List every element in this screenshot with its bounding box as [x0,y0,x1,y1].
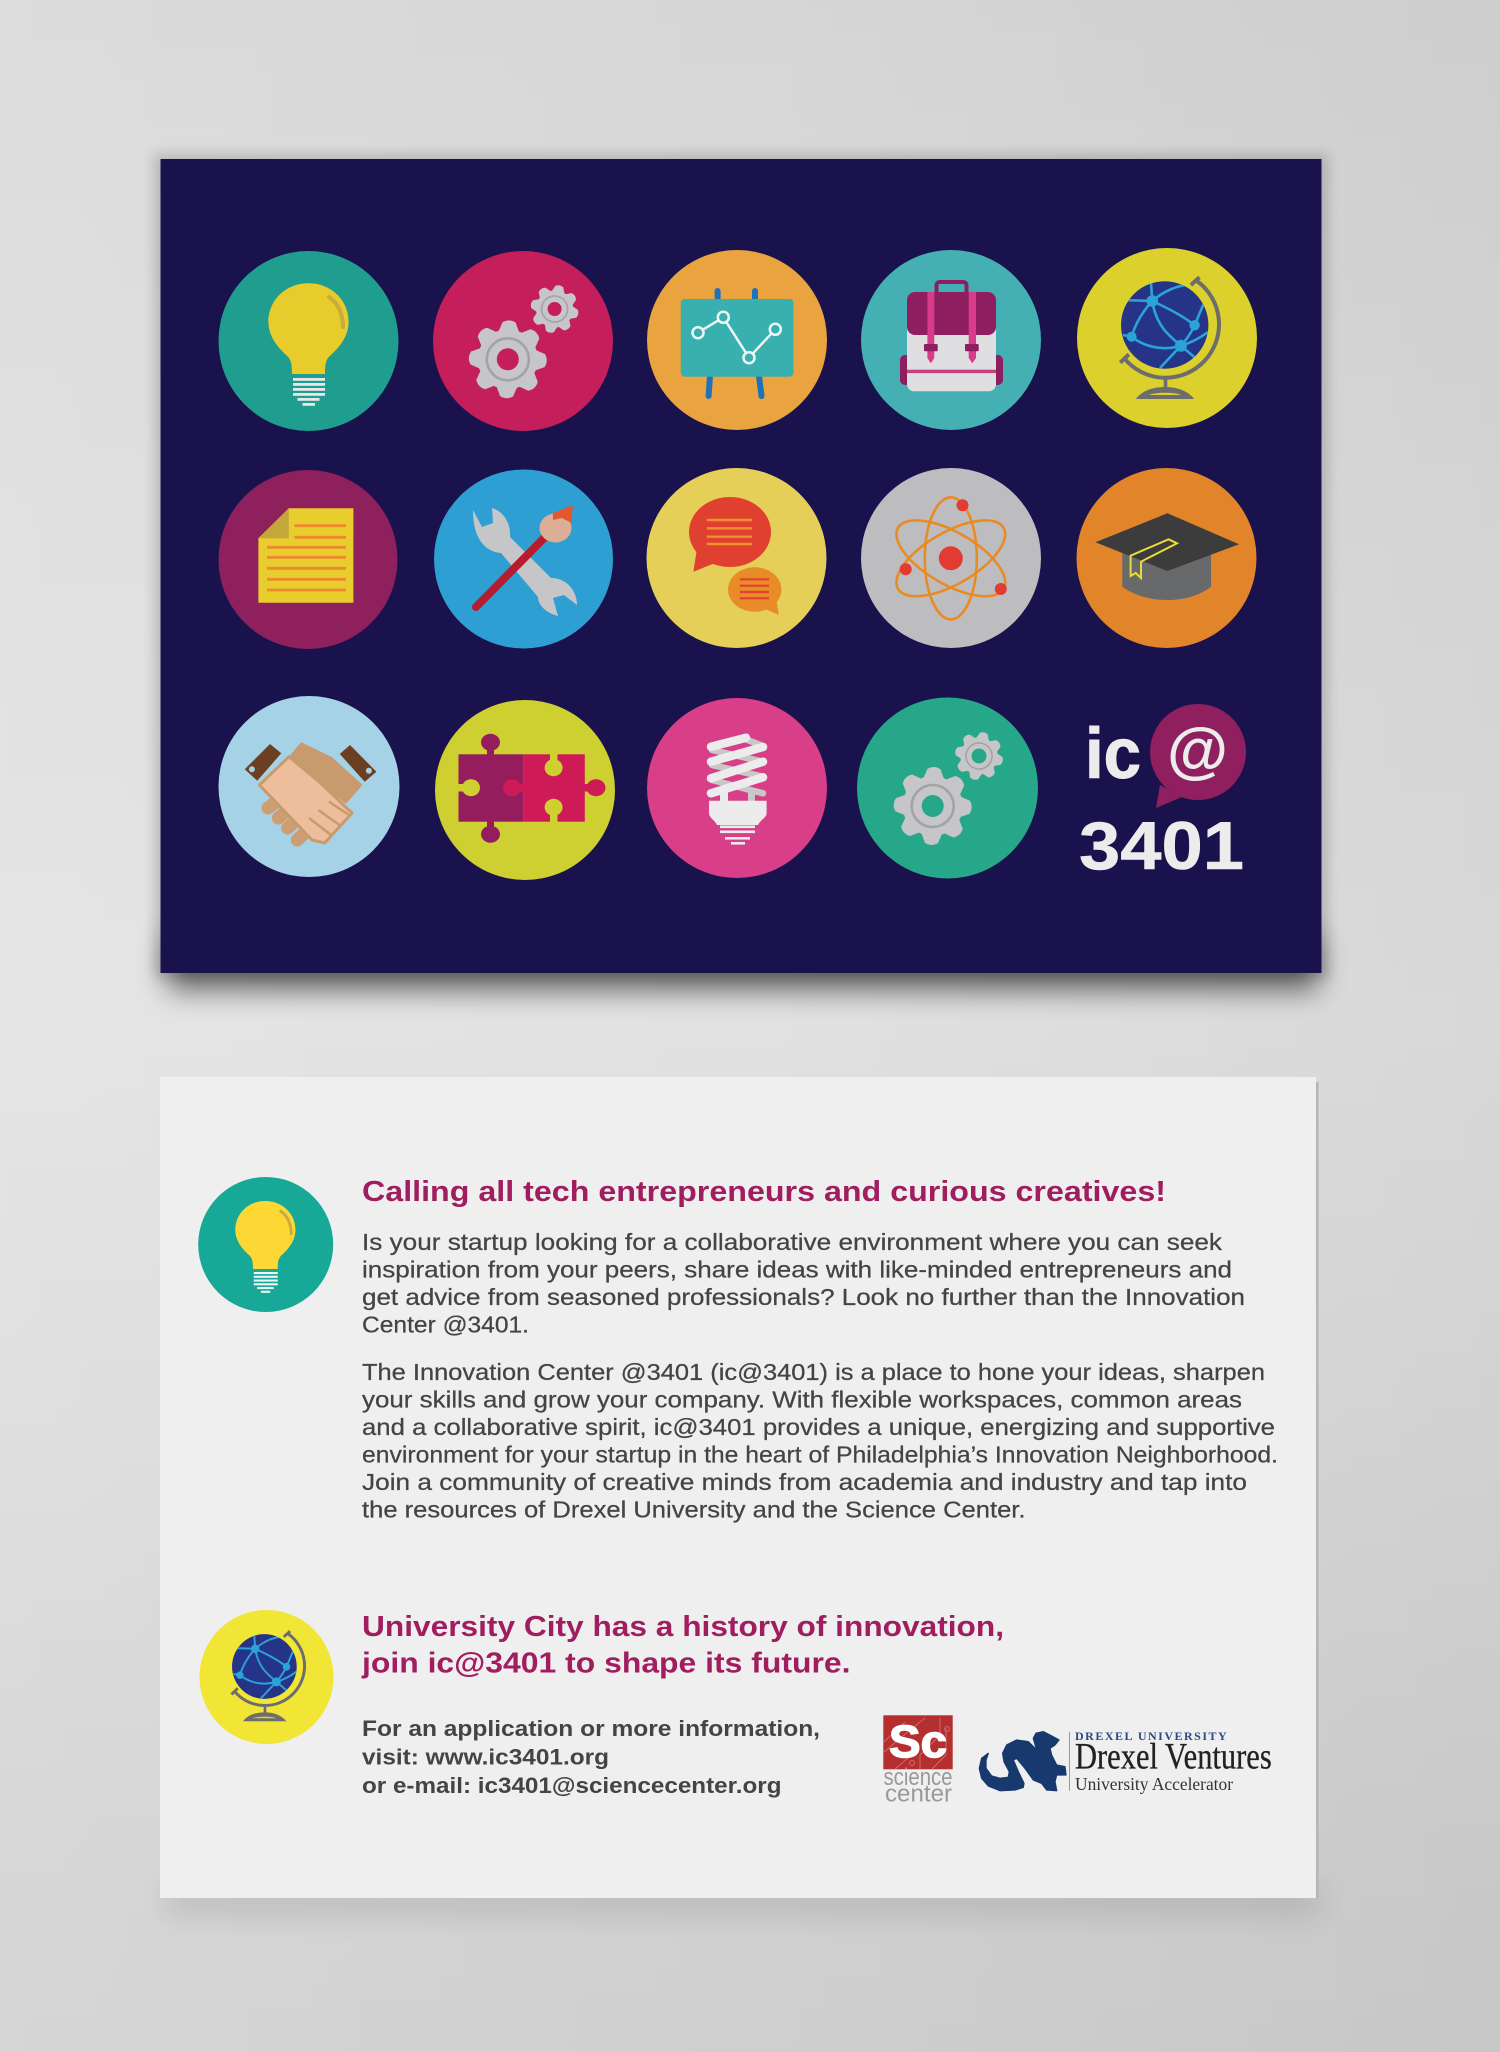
text block: description paragraph: and a collaborative spirit, ic@3401 provides a unique, energizing and supportive [362,1414,1275,1440]
logo: drexel dragon [979,1732,1066,1791]
panel: front card [160,159,1322,973]
text block: description paragraph: Join a community of creative minds from academia and industry and tap into [362,1469,1247,1495]
icon: graduation cap [1076,468,1256,648]
logo: drexel ventures wordmark: DREXEL UNIVERSITY [1075,1729,1227,1743]
panel: back card [160,1077,1318,1898]
heading: university city [361,1611,1004,1680]
logo: science center: science [884,1764,952,1791]
logo: ic@3401: @ [1167,716,1228,785]
icon: backpack [861,250,1041,430]
icon: speech bubbles [646,468,826,648]
heading: calling all: Calling all tech entrepreneurs and curious creatives! [362,1176,1166,1208]
icon: document [218,470,398,649]
text block: intro paragraph: inspiration from your peers, share ideas with like-minded entrepreneurs and [362,1256,1232,1282]
icon: gears teal [857,698,1038,878]
text block: contact: visit: www.ic3401.org [362,1744,609,1770]
logo: drexel ventures wordmark: University Accelerator [1075,1774,1233,1794]
icon: spiral bulb [647,698,827,878]
text block: intro paragraph: Center @3401. [362,1312,529,1338]
logo: science center: Sc [889,1716,947,1767]
logo: ic@3401: 3401 [1079,808,1244,884]
logo: drexel ventures wordmark: Drexel Ventures [1075,1736,1272,1777]
logo: ic@3401 [1079,704,1246,884]
icon: atom [861,468,1041,648]
icon: wrench and brush [434,470,613,648]
text block: description paragraph: environment for your startup in the heart of Philadelphia’s Innovation Neighborhood. [362,1442,1278,1468]
icon: puzzle [435,700,615,880]
text block: description paragraph [362,1359,1278,1522]
shadow of front card [154,154,1328,990]
text block: intro paragraph: get advice from seasoned professionals? Look no further than the Innovation [362,1284,1245,1310]
text block: contact: or e-mail: ic3401@sciencecenter.org [362,1773,782,1798]
text block: intro paragraph [362,1229,1245,1338]
icon: chart on easel [647,250,827,430]
icon: globe [1077,248,1257,428]
text block: description paragraph: the resources of Drexel University and the Science Center. [362,1496,1026,1522]
heading: university city: University City has a history of innovation, [362,1611,1004,1643]
icon: light bulb [218,251,398,431]
logo: ic@3401: ic [1085,715,1141,794]
icon: bulb small [198,1177,333,1312]
logo: science center [883,1715,953,1808]
icon: gears crimson [433,251,613,431]
icon: handshake [218,696,400,877]
icon: globe small [200,1610,334,1744]
shadow of back card [165,1885,1320,1915]
text block: description paragraph: The Innovation Center @3401 (ic@3401) is a place to hone your ideas, sharpen [362,1359,1265,1385]
heading: university city: join ic@3401 to shape its future. [361,1648,850,1680]
logo: science center: center [885,1780,952,1808]
text block: intro paragraph: Is your startup looking for a collaborative environment where you can seek [362,1229,1223,1255]
text block: contact [362,1716,820,1798]
text block: description paragraph: your skills and grow your company. With flexible workspaces, common areas [362,1386,1242,1412]
logo: drexel ventures wordmark [1069,1729,1272,1794]
text block: contact: For an application or more information, [362,1716,820,1741]
